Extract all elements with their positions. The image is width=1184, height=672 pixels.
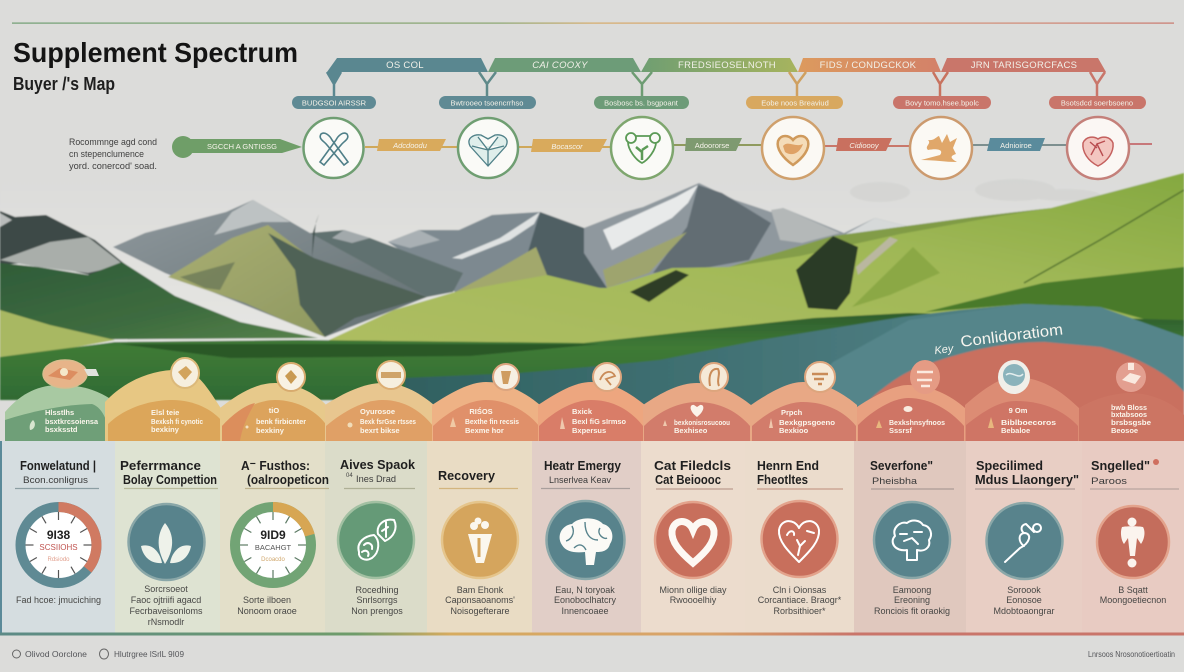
left crag xyxy=(0,211,126,275)
arch 4: Bexk fsrGse rtsses xyxy=(360,417,416,426)
column heading 4: 04 xyxy=(346,473,353,479)
caption 6: Eau, N toryoak xyxy=(555,585,615,595)
column heading 4: Ines Drad xyxy=(356,474,396,485)
medallion 8 xyxy=(805,362,835,392)
arch 2: bexkiny xyxy=(151,425,180,434)
gauge 3: Dcoacdo xyxy=(261,557,286,563)
banner: metrics xyxy=(941,58,1106,72)
pill 3 xyxy=(594,96,689,109)
caption 7 xyxy=(659,585,727,605)
pill 2 xyxy=(439,96,536,109)
top rule xyxy=(12,22,1174,24)
arch 4: Oyurosoe xyxy=(360,407,395,416)
legend item 2: Hlutrgree lSrlL 9I09 xyxy=(114,649,184,659)
caption 2: Faoc ojtriifi agacd xyxy=(131,595,201,605)
banner: conditions: FIDS / CONDGCKOK xyxy=(820,60,917,71)
column heading 5: Recovery xyxy=(438,468,496,483)
caption 6 xyxy=(554,585,617,616)
arch 1 xyxy=(5,385,112,441)
ribbon 1: Adcdoodu xyxy=(392,141,428,150)
caption 11: Moongoetiecnon xyxy=(1100,595,1166,605)
arch 6: Bexl fiG sIrmso xyxy=(572,417,626,426)
pill 2: Bwtrooeo tsoencrrhso xyxy=(451,98,523,108)
icon: walnut xyxy=(338,502,414,578)
medallion 3 xyxy=(277,363,305,391)
intro text block xyxy=(69,137,157,172)
ribbon 3 xyxy=(685,138,742,151)
arch 5: Bexthe fin recsis xyxy=(465,417,519,426)
caption 3 xyxy=(237,595,297,616)
caption 5: Noisogefterare xyxy=(450,606,510,616)
medallion 10 xyxy=(998,360,1030,394)
ribbon 5: Adnioiroe xyxy=(1000,141,1032,150)
gauge 1 xyxy=(20,507,96,583)
meadow stripes xyxy=(120,344,600,358)
icon: green heart with loops xyxy=(611,117,673,179)
column heading 5 xyxy=(438,468,518,488)
arch 7: bexkonisrosucoou xyxy=(674,418,730,427)
arch 5 xyxy=(432,382,540,441)
caption 6: Innencoaee xyxy=(561,606,609,616)
arch 9: Bexkshnsyfnoos xyxy=(889,418,945,427)
caption 6: Eonoboclhatcry xyxy=(554,595,617,605)
icon: tree outline xyxy=(874,502,950,578)
gauge 1: 9I38 xyxy=(47,528,71,542)
timeline start node: SGCCH A GNTIGSG xyxy=(207,142,277,151)
footer legend xyxy=(12,649,184,659)
column heading 1: Bcon.conligrus xyxy=(23,475,88,486)
ribbon 5 xyxy=(987,138,1045,151)
icon: key charm xyxy=(986,503,1062,579)
icon: tan tree xyxy=(910,117,972,179)
caption 7: Mionn ollige diay xyxy=(659,585,727,595)
left green hill xyxy=(0,262,318,340)
arch 8 xyxy=(751,382,857,441)
caption 8: Rorbsithioer* xyxy=(773,606,826,616)
icon: brain xyxy=(546,501,624,579)
gauge 3: BACAHGT xyxy=(255,543,292,552)
arch 7: Bexhiseo xyxy=(674,426,708,435)
column heading 8: Fheotltes xyxy=(757,472,808,487)
caption 3: Nonoom oraoe xyxy=(237,606,297,616)
ribbon 2: Bocascor xyxy=(551,142,583,151)
arch 11 xyxy=(1079,393,1184,441)
timeline rail xyxy=(365,144,1152,147)
arch 11: bxtabsoos xyxy=(1111,410,1147,419)
arch 2: Bexksh fi cynotic xyxy=(151,417,203,426)
icon: heart outline xyxy=(762,501,838,577)
mid olive hill xyxy=(329,173,1184,350)
caption 4: Non prengos xyxy=(351,606,403,616)
column heading 3: (oalroopeticon xyxy=(247,472,329,487)
caption 4 xyxy=(351,585,403,616)
arch 8: Prpch xyxy=(781,408,803,417)
arch 8: Bexkgpsgoeno xyxy=(779,418,835,427)
landscape scene xyxy=(0,173,1184,441)
arch 7 xyxy=(643,383,751,441)
cost category banners xyxy=(327,58,1106,72)
banner: research: FREDSIEOSELNOTH xyxy=(678,60,776,71)
column heading 6: Heatr Emergy xyxy=(544,458,622,473)
medallion 5 xyxy=(493,364,519,390)
legend item 1: Olivod Oorclone xyxy=(25,649,87,659)
column heading 1 xyxy=(15,458,99,488)
pill 6 xyxy=(1049,96,1146,109)
column heading 9: Severfone" xyxy=(870,458,933,473)
slope furrow xyxy=(1024,190,1184,283)
column heading 7: Cat Filedcls xyxy=(654,458,731,473)
caption 4: Snrlsorrgs xyxy=(356,595,398,605)
journey timeline xyxy=(172,136,1152,158)
arch 10: Biblboecoros xyxy=(1001,418,1056,427)
arch 9 xyxy=(857,385,965,441)
ribbon 2 xyxy=(531,139,607,152)
caption 2: Fecrbaveisonloms xyxy=(129,606,203,616)
column heading 11 xyxy=(1090,458,1179,489)
caption 10: Soroook xyxy=(1007,585,1041,595)
medallion 9 xyxy=(910,360,940,394)
pill 5 xyxy=(893,96,991,109)
pale rock patch xyxy=(856,237,898,275)
caption 9 xyxy=(874,585,950,616)
pill 1: BUDGSOI AIRSSR xyxy=(302,98,367,108)
banner: os col xyxy=(327,58,488,72)
gauge 3: 9ID9 xyxy=(260,528,286,542)
arch 3: benk firbicnter xyxy=(256,417,306,426)
gauge 1: SCSIIOHS xyxy=(39,543,78,552)
caption 4: Rocedhing xyxy=(355,585,399,595)
caption 2: Sorcrsoeot xyxy=(144,584,188,594)
left light field xyxy=(0,310,115,357)
banner: conditions xyxy=(798,58,941,72)
arch 9: Sssrsf xyxy=(889,426,912,435)
arch 1: bsxksstd xyxy=(45,425,78,434)
intro text block: yord. conercod' soad. xyxy=(69,161,157,172)
arch 4: bexrt bikse xyxy=(360,426,400,435)
arch 3 xyxy=(220,383,329,441)
second ridge xyxy=(852,247,940,307)
caption 11 xyxy=(1100,585,1166,605)
arch 2: Elsl teie xyxy=(151,408,179,417)
column heading 10: Mdus Llaongery" xyxy=(975,472,1079,487)
dark hill patch large xyxy=(796,236,858,310)
gauge 1: Rdsiodo xyxy=(47,557,70,563)
key considerations label xyxy=(933,321,1064,357)
arch 1: Hlsstlhs xyxy=(45,408,74,417)
arch 6: Bxpersus xyxy=(572,426,606,435)
lake inflow xyxy=(760,304,1184,441)
dark hill patch small xyxy=(630,270,689,302)
key considerations label: Conlidoratiom xyxy=(960,321,1064,351)
caption 9: Eamoong xyxy=(893,585,931,595)
pill 5: Bovy tomo.hsee.bpolc xyxy=(905,98,979,108)
caption 10 xyxy=(993,585,1055,616)
arch 8: Bexkioo xyxy=(779,426,809,435)
icon: ice cream cone xyxy=(442,502,518,578)
arch 11: bwb Bloss xyxy=(1111,403,1147,412)
caption 5: Bam Ehonk xyxy=(457,585,504,595)
central mountain xyxy=(113,200,427,337)
medallion 7 xyxy=(700,363,728,391)
arch 3: bexkiny xyxy=(256,426,285,435)
key considerations label: Key xyxy=(934,343,956,357)
side ridge xyxy=(310,230,463,297)
medallion 1 xyxy=(43,360,99,388)
caption 8: Corcantiace. Braogr* xyxy=(758,595,842,605)
caption 8 xyxy=(758,585,842,616)
red mound xyxy=(858,342,1184,441)
gauge 3 xyxy=(235,507,311,583)
caption 1: Fad hcoe: jmuciching xyxy=(16,595,101,605)
tall snowy peak xyxy=(584,183,907,288)
pill 4: Eobe noos Breaviud xyxy=(761,98,829,108)
column heading 2: Bolay Compettion xyxy=(123,472,217,487)
ribbon 4 xyxy=(836,138,892,151)
caption 5: Caponsaoanoms' xyxy=(445,595,515,605)
ribbon 3: Adoororse xyxy=(695,141,729,150)
arch 6: Bxick xyxy=(572,407,593,416)
caption 8: Cln i Oionsas xyxy=(773,585,827,595)
teal river xyxy=(405,304,1184,441)
arch 3: tiO xyxy=(269,406,279,415)
column heading 9 xyxy=(870,458,954,489)
medallion 6 xyxy=(593,363,621,391)
banner: metrics: JRN TARISGORCFACS xyxy=(971,60,1077,71)
arch 10: Bebaloe xyxy=(1001,426,1030,435)
arch 4 xyxy=(325,383,434,441)
column heading 2: Peferrmance xyxy=(120,458,201,473)
caption 9: Ronciois fit oraokig xyxy=(874,606,950,616)
banner connectors xyxy=(327,72,1105,96)
intro text block: cn stepenclumence xyxy=(69,149,144,160)
banner: category: CAI COOXY xyxy=(532,60,588,71)
medallion 2 xyxy=(171,358,199,388)
pill 3: Bosbosc bs. bsgpoant xyxy=(604,98,679,108)
caption 5 xyxy=(445,585,515,616)
icon: tan heart xyxy=(762,117,824,179)
column heading 4 xyxy=(340,457,416,488)
column heading 1: Fonwelatund | xyxy=(20,458,96,473)
column heading 7 xyxy=(654,458,733,489)
lower right dark grass xyxy=(925,267,1184,330)
pill 6: Bsotsdcd soerbsoeno xyxy=(1061,98,1133,108)
distant clouds xyxy=(850,179,1100,202)
column heading 2 xyxy=(120,458,218,488)
arch 1: bsxtkrcsoiensa xyxy=(45,417,99,426)
arch 2 xyxy=(105,370,222,441)
column heading 7: Cat Beioooc xyxy=(655,472,721,487)
pale column panels xyxy=(0,441,1184,635)
pill 1 xyxy=(292,96,376,109)
arch 5: Bexme hor xyxy=(465,426,504,435)
subtitle: Buyer /'s Map xyxy=(13,74,115,94)
ribbon 4: Cidioooy xyxy=(849,141,880,150)
column heading 10: Specilimed xyxy=(976,458,1043,473)
icon: red heart xyxy=(1067,117,1129,179)
medallion 11 xyxy=(1116,362,1146,392)
sky haze xyxy=(0,180,1184,350)
pill 4 xyxy=(746,96,843,109)
caption 7: Rwoooelhiy xyxy=(670,595,717,605)
arch 10 xyxy=(965,377,1079,441)
intro text block: Rocommnge agd cond xyxy=(69,137,157,148)
caption 2 xyxy=(129,584,203,627)
tag pills row xyxy=(292,96,1146,109)
arch 11: brsbsgsbe xyxy=(1111,418,1151,427)
caption 10: Eonosoe xyxy=(1006,595,1042,605)
column heading 10 xyxy=(975,458,1079,489)
timeline start node xyxy=(172,136,302,158)
ribbon 1 xyxy=(377,139,446,151)
caption 10: Mdobtoaongrar xyxy=(993,606,1055,616)
icon: leaf sprout xyxy=(128,504,204,580)
medallion 4 xyxy=(377,361,405,389)
banner: os col: OS COL xyxy=(386,60,424,71)
caption 9: Ereoning xyxy=(894,595,930,605)
bottom rule xyxy=(0,632,1184,636)
arch 5: RIŚOS xyxy=(469,407,493,416)
arch 10: 9 Om xyxy=(1009,406,1028,415)
arch 6 xyxy=(538,382,645,441)
hill ridge shadow xyxy=(729,208,1051,267)
column heading 9: Pheisbha xyxy=(872,476,918,487)
mid snowy range xyxy=(388,212,607,300)
column heading 4: Aives Spaok xyxy=(340,457,416,472)
caption 3: Sorte ilboen xyxy=(243,595,291,605)
column heading 6: Lnserlvea Keav xyxy=(549,475,611,486)
column heading 8: Henrn End xyxy=(757,458,819,473)
title: Supplement Spectrum xyxy=(13,37,298,68)
banner: category xyxy=(488,58,641,72)
caption 11: B Sqatt xyxy=(1118,585,1148,595)
column heading 3 xyxy=(241,458,329,488)
banner: research xyxy=(641,58,798,72)
caption 2: rNsmodlr xyxy=(148,617,184,627)
valley meadow xyxy=(0,313,1184,400)
column heading 6 xyxy=(541,458,630,488)
column heading 11: Sngelled" xyxy=(1091,458,1150,473)
icon: crossed tools xyxy=(304,118,364,178)
arch 11: Beosoe xyxy=(1111,426,1138,435)
column heading 8 xyxy=(757,458,843,489)
column heading 11: Paroos xyxy=(1091,476,1127,487)
icon: solid heart xyxy=(655,502,731,578)
icon: figure xyxy=(1097,506,1169,578)
column heading 3: A⁻ Fusthos: xyxy=(241,458,310,473)
icon: faceted heart xyxy=(458,118,518,178)
